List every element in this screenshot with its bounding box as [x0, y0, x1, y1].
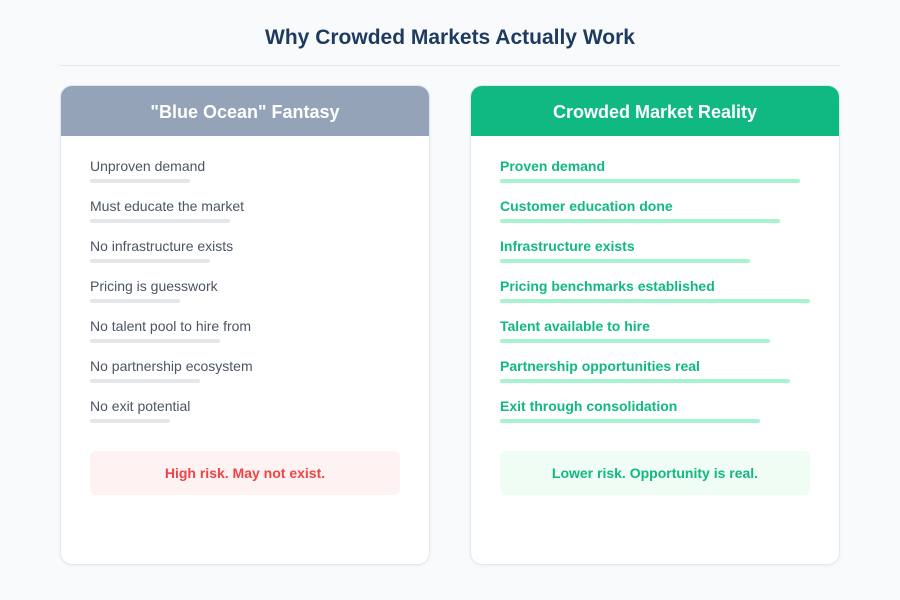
heading: reality	[471, 86, 839, 136]
panel: crowded market reality: Infrastructure exists	[500, 238, 635, 254]
panel: blue ocean fantasy: Pricing is guesswork	[90, 278, 218, 294]
callout: high risk	[90, 451, 400, 495]
panel: blue ocean fantasy: No infrastructure exists	[90, 238, 233, 254]
panel: crowded market reality: Pricing benchmarks established	[500, 278, 715, 294]
panel: crowded market reality: Customer education done	[500, 198, 673, 214]
heading: reality: Crowded Market Reality	[553, 102, 757, 122]
list: fantasy items	[90, 158, 253, 423]
title: Why Crowded Markets Actually Work	[265, 26, 635, 49]
panel: blue ocean fantasy: No partnership ecosystem	[90, 358, 253, 374]
panel: blue ocean fantasy	[60, 85, 430, 565]
panel: crowded market reality: Exit through consolidation	[500, 398, 677, 414]
callout: high risk: High risk. May not exist.	[165, 465, 325, 481]
panel: blue ocean fantasy: Must educate the market	[90, 198, 244, 214]
panel: blue ocean fantasy: Unproven demand	[90, 158, 205, 174]
panel: crowded market reality: Talent available to hire	[500, 318, 650, 334]
callout: lower risk: Lower risk. Opportunity is real.	[552, 465, 758, 481]
panel: crowded market reality: Proven demand	[500, 158, 605, 174]
panel: crowded market reality: Partnership opportunities real	[500, 358, 700, 374]
heading: blue ocean: "Blue Ocean" Fantasy	[150, 102, 340, 122]
callout: lower risk	[500, 451, 810, 495]
panel: blue ocean fantasy: No talent pool to hire from	[90, 318, 251, 334]
panel: crowded market reality	[470, 85, 840, 565]
list: reality items	[500, 158, 810, 423]
panel: blue ocean fantasy: No exit potential	[90, 398, 190, 414]
heading: blue ocean	[61, 86, 429, 136]
